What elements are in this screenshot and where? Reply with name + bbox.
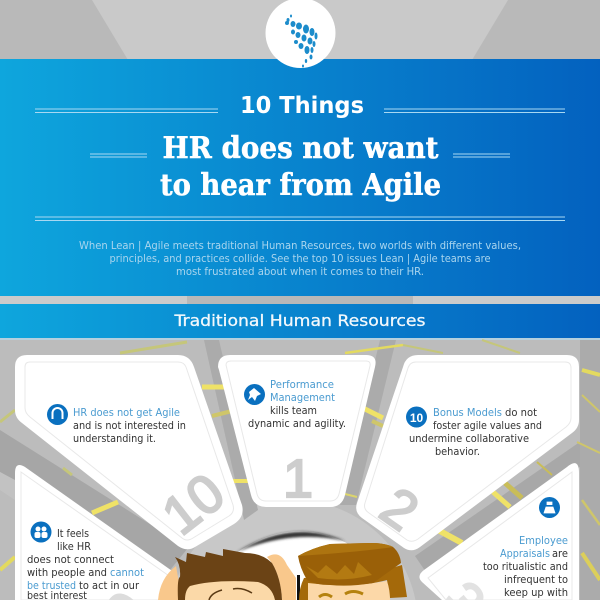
section band <box>0 304 600 338</box>
hub opening <box>232 531 352 600</box>
text: Employee Appraisals: are <box>552 548 568 560</box>
intro text: principles, and practices collide. See the top 10 issues Lean | Agile teams are <box>110 253 490 265</box>
text: Performance Management: kills team <box>270 405 317 417</box>
title: to hear from Agile <box>160 168 441 203</box>
icon: bonus <box>406 406 427 428</box>
intro text <box>79 240 521 278</box>
left rule beside title <box>90 154 147 157</box>
number 1: 1 <box>283 449 313 509</box>
text: Employee Appraisals: Employee <box>519 535 568 547</box>
number 10: 10 <box>151 462 236 546</box>
text: Employee Appraisals: Appraisals <box>500 548 550 560</box>
text: It feels like HR: be trusted <box>27 580 76 592</box>
section heading: Traditional Human Resources <box>173 311 426 330</box>
text: It feels like HR: does not connect <box>27 554 114 566</box>
quiff <box>298 543 401 586</box>
wheel background <box>0 338 600 600</box>
panel: item 3 <box>419 463 579 600</box>
text: HR does not get Agile: understanding it. <box>73 433 156 445</box>
face <box>185 581 275 600</box>
text: Employee Appraisals: infrequent to <box>504 574 568 586</box>
icon: bonus: 10 <box>410 411 423 425</box>
text: Performance Management: dynamic and agility. <box>248 418 346 430</box>
text: Performance Management <box>248 379 346 430</box>
side hair <box>299 565 407 600</box>
icon: people <box>30 522 52 542</box>
text: HR does not get Agile <box>73 407 186 445</box>
text: Performance Management: Performance <box>270 379 334 391</box>
icon: headphones <box>47 404 68 425</box>
eyebrows <box>209 588 252 600</box>
logo badge <box>266 0 336 68</box>
text: Bonus Models: behavior. <box>435 446 480 458</box>
text: Bonus Models: foster agile values and <box>433 420 542 432</box>
text: It feels like HR: It feels <box>57 528 89 540</box>
text: It feels like HR: with people and <box>27 567 107 579</box>
text: It feels like HR <box>27 528 144 600</box>
text: It feels like HR: to act in our <box>79 580 140 592</box>
character: left man <box>158 549 296 600</box>
icon: pushpin <box>244 384 265 405</box>
hair <box>175 549 282 600</box>
text: Performance Management: Management <box>270 392 335 404</box>
quiff zigzag <box>306 562 372 579</box>
text: Bonus Models: do not <box>505 407 537 419</box>
title: HR does not want <box>162 131 439 166</box>
text: Employee Appraisals: too ritualistic and <box>483 561 568 573</box>
panel: item 10 <box>15 355 243 549</box>
panel: item 9 <box>15 465 175 600</box>
collar line <box>297 575 300 600</box>
number 2: 2 <box>370 476 429 542</box>
title <box>160 131 441 203</box>
intro text: most frustrated about when it comes to their HR. <box>176 266 424 278</box>
text: It feels like HR: like HR <box>57 541 92 553</box>
rule under title <box>35 217 565 220</box>
text: Employee Appraisals <box>483 535 568 599</box>
panel: item 1 <box>218 355 376 509</box>
character: right man <box>297 543 407 600</box>
quiff highlight <box>298 543 393 556</box>
blue header panel <box>0 59 600 296</box>
panel: item 2 <box>356 355 579 550</box>
left rule beside 10 Things <box>35 109 218 112</box>
text: HR does not get Agile: HR does not get Agile <box>73 407 180 419</box>
text: HR does not get Agile: and is not interested in <box>73 420 186 432</box>
left shoulder <box>158 566 182 600</box>
right hand <box>267 554 296 600</box>
text: Bonus Models <box>409 407 542 458</box>
grey divider strip <box>0 296 600 304</box>
text: Bonus Models: undermine collaborative <box>409 433 529 445</box>
text: Employee Appraisals: keep up with <box>504 587 568 599</box>
icon: appraisals <box>539 497 560 518</box>
text: It feels like HR: cannot <box>110 567 144 579</box>
face <box>308 581 390 600</box>
text: Bonus Models: Bonus Models <box>433 407 502 419</box>
top grey banner <box>0 0 600 60</box>
heading: 10 Things: 10 Things <box>240 93 364 119</box>
right rule beside title <box>453 154 510 157</box>
intro text: When Lean | Agile meets traditional Human Resources, two worlds with different values, <box>79 240 521 252</box>
eyebrows <box>319 592 363 597</box>
right rule beside 10 Things <box>384 109 565 112</box>
